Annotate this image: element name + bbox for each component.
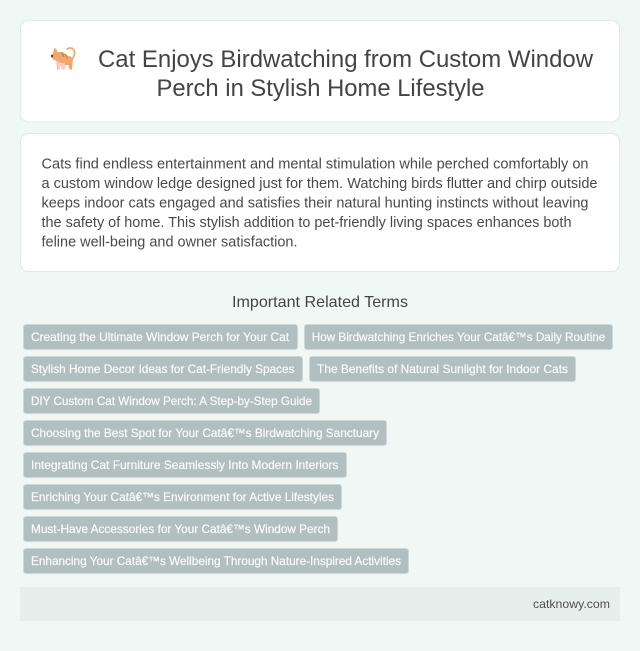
tag 10: Enhancing Your Catâ€™s Wellbeing Through Nature-Inspired Activities [31, 554, 401, 568]
footer [20, 587, 620, 621]
tag 1: Creating the Ultimate Window Perch for Your Cat [31, 330, 290, 344]
panel: title card [20, 20, 620, 122]
title: Perch in Stylish Home Lifestyle [156, 75, 484, 102]
icon: cat [51, 48, 75, 70]
heading: related terms: Important Related Terms [232, 294, 408, 311]
tag 10 [24, 548, 408, 574]
tag 7 [24, 452, 346, 478]
title: Cat Enjoys Birdwatching from Custom Window [98, 46, 594, 73]
description text: keeps indoor cats engaged and satisfies their natural hunting instincts without leaving [42, 194, 588, 212]
description text: the safety of home. This stylish addition to pet-friendly living spaces enhances both [42, 214, 572, 231]
tag 3: Stylish Home Decor Ideas for Cat-Friendly Spaces [31, 362, 294, 376]
tag 2 [304, 324, 612, 350]
title [98, 46, 594, 102]
tag 9: Must-Have Accessories for Your Catâ€™s Window Perch [31, 522, 330, 536]
tag 5 [24, 388, 320, 414]
tag 4 [310, 356, 576, 382]
tag 9 [24, 516, 338, 542]
description text: Cats find endless entertainment and mental stimulation while perched comfortably on [42, 156, 588, 172]
tag list [24, 324, 612, 574]
tag 1 [24, 324, 298, 350]
tag 5: DIY Custom Cat Window Perch: A Step-by-Step Guide [31, 394, 312, 408]
panel: description [20, 134, 620, 272]
description text: a custom window ledge designed just for them. Watching birds flutter and chirp outside [42, 175, 598, 192]
description text: feline well-being and owner satisfaction. [42, 234, 298, 250]
tag 8 [24, 484, 342, 510]
tag 7: Integrating Cat Furniture Seamlessly Into Modern Interiors [31, 458, 338, 472]
footer site name: catknowy.com [533, 597, 610, 611]
description text [42, 156, 598, 250]
tag 2: How Birdwatching Enriches Your Catâ€™s Daily Routine [312, 330, 606, 344]
tag 3 [24, 356, 302, 382]
tag 8: Enriching Your Catâ€™s Environment for Active Lifestyles [31, 490, 334, 504]
tag 4: The Benefits of Natural Sunlight for Indoor Cats [317, 362, 568, 376]
tag 6: Choosing the Best Spot for Your Catâ€™s Birdwatching Sanctuary [31, 426, 379, 440]
tag 6 [24, 420, 386, 446]
